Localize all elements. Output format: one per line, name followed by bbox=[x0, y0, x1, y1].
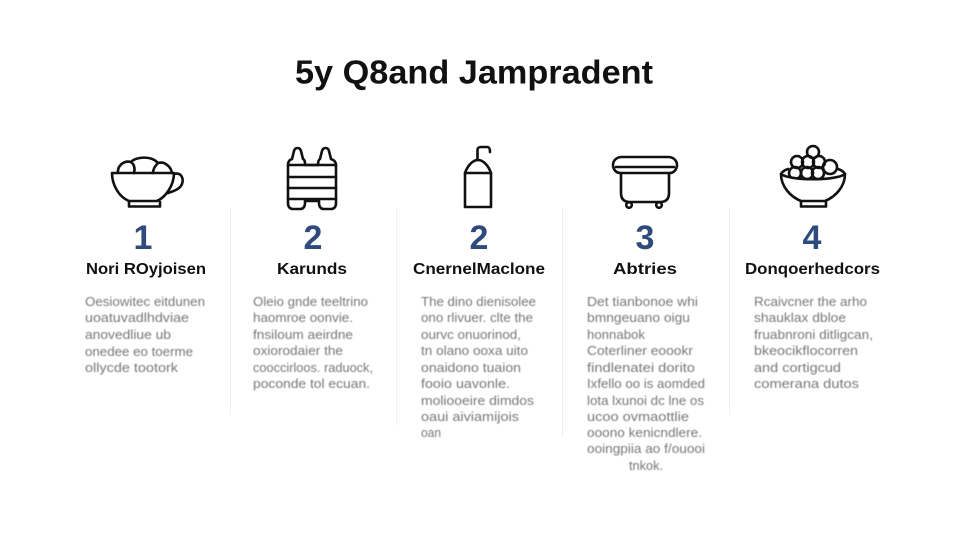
heading 5: Donqoerhedcors bbox=[745, 261, 880, 278]
body text 4: Det tianbonoe whi bbox=[587, 295, 698, 309]
body text 4: bmngeuano oigu bbox=[587, 311, 690, 325]
body text 2: fnsiloum aeirdne bbox=[253, 328, 353, 342]
body text 1: anovedliue ub bbox=[85, 328, 171, 342]
body text 3: ourvc onuorinod, bbox=[421, 328, 521, 342]
body text 1 bbox=[85, 295, 205, 375]
body text 3: onaidono tuaion bbox=[421, 361, 521, 375]
body text 2: oxiorodaier the bbox=[253, 344, 343, 358]
icon: pump bottle bbox=[465, 147, 491, 207]
body text 5: shauklax dbloe bbox=[754, 311, 846, 325]
body text 4: honnabok bbox=[587, 328, 646, 342]
body text 4: ooono kenicndlere. bbox=[587, 426, 702, 440]
body text 4: tnkok. bbox=[629, 459, 663, 473]
body text 3: fooio uavonle. bbox=[421, 377, 510, 391]
panel: column 5 bbox=[745, 146, 880, 391]
body text 4: Coterliner eoookr bbox=[587, 344, 693, 358]
number 2: 2 bbox=[470, 219, 488, 257]
heading 3: CnernelMaclone bbox=[413, 261, 545, 278]
body text 5 bbox=[754, 295, 873, 391]
body text 5: bkeocikflocorren bbox=[754, 344, 858, 358]
body text 3 bbox=[421, 295, 536, 440]
heading 4: Abtries bbox=[613, 261, 677, 278]
body text 2: haomroe oonvie. bbox=[253, 311, 353, 325]
icon: lidded tub bbox=[613, 157, 677, 208]
icon: cup with food bbox=[112, 158, 183, 206]
panel: column 2 bbox=[253, 148, 373, 391]
body text 2: poconde tol ecuan. bbox=[253, 377, 370, 391]
body text 3: ono rlivuer. clte the bbox=[421, 311, 533, 325]
body text 3: oaui aiviamijois bbox=[421, 410, 519, 424]
title: 5y Q8and Jampradent bbox=[295, 54, 653, 90]
body text 2: Oleio gnde teeltrino bbox=[253, 295, 368, 309]
body text 4: findlenatei dorito bbox=[587, 361, 695, 375]
body text 2 bbox=[253, 295, 373, 391]
body text 5: fruabnroni ditligcan, bbox=[754, 328, 873, 342]
heading 2: Karunds bbox=[277, 261, 347, 278]
body text 5: comerana dutos bbox=[754, 377, 859, 391]
number 1: 1 bbox=[134, 219, 152, 257]
body text 5: Rcaivcner the arho bbox=[754, 295, 867, 309]
heading 1: Nori ROyjoisen bbox=[86, 261, 206, 278]
body text 1: ollycde tootork bbox=[85, 361, 179, 375]
icon: bowl of fruit bbox=[781, 146, 845, 206]
number 4: 4 bbox=[803, 219, 822, 257]
number 3: 3 bbox=[636, 219, 654, 257]
panel: column 1 bbox=[85, 158, 206, 375]
body text 5: and cortigcud bbox=[754, 361, 841, 375]
body text 4 bbox=[587, 295, 705, 473]
body text 1: Oesiowitec eitdunen bbox=[85, 295, 205, 309]
panel: column 3 bbox=[413, 147, 545, 440]
body text 3: tn olano ooxa uito bbox=[421, 344, 528, 358]
body text 1: onedee eo toerme bbox=[85, 345, 193, 359]
body text 2: cooccirloos. raduock, bbox=[253, 361, 373, 375]
number 2: 2 bbox=[304, 219, 322, 257]
body text 3: moliooeire dimdos bbox=[421, 394, 534, 408]
body text 4: ooingpiia ao f/ouooi bbox=[587, 442, 705, 456]
body text 3: oan bbox=[421, 426, 441, 440]
body text 4: ucoo ovmaottlie bbox=[587, 410, 689, 424]
body text 4: Ixfello oo is aomded bbox=[587, 377, 705, 391]
icon: striped rack with bottles bbox=[288, 148, 336, 209]
body text 3: The dino dienisolee bbox=[421, 295, 536, 309]
body text 4: lota lxunoi dc lne os bbox=[587, 394, 704, 408]
body text 1: uoatuvadlhdviae bbox=[85, 311, 189, 325]
panel: column 4 bbox=[587, 157, 705, 473]
